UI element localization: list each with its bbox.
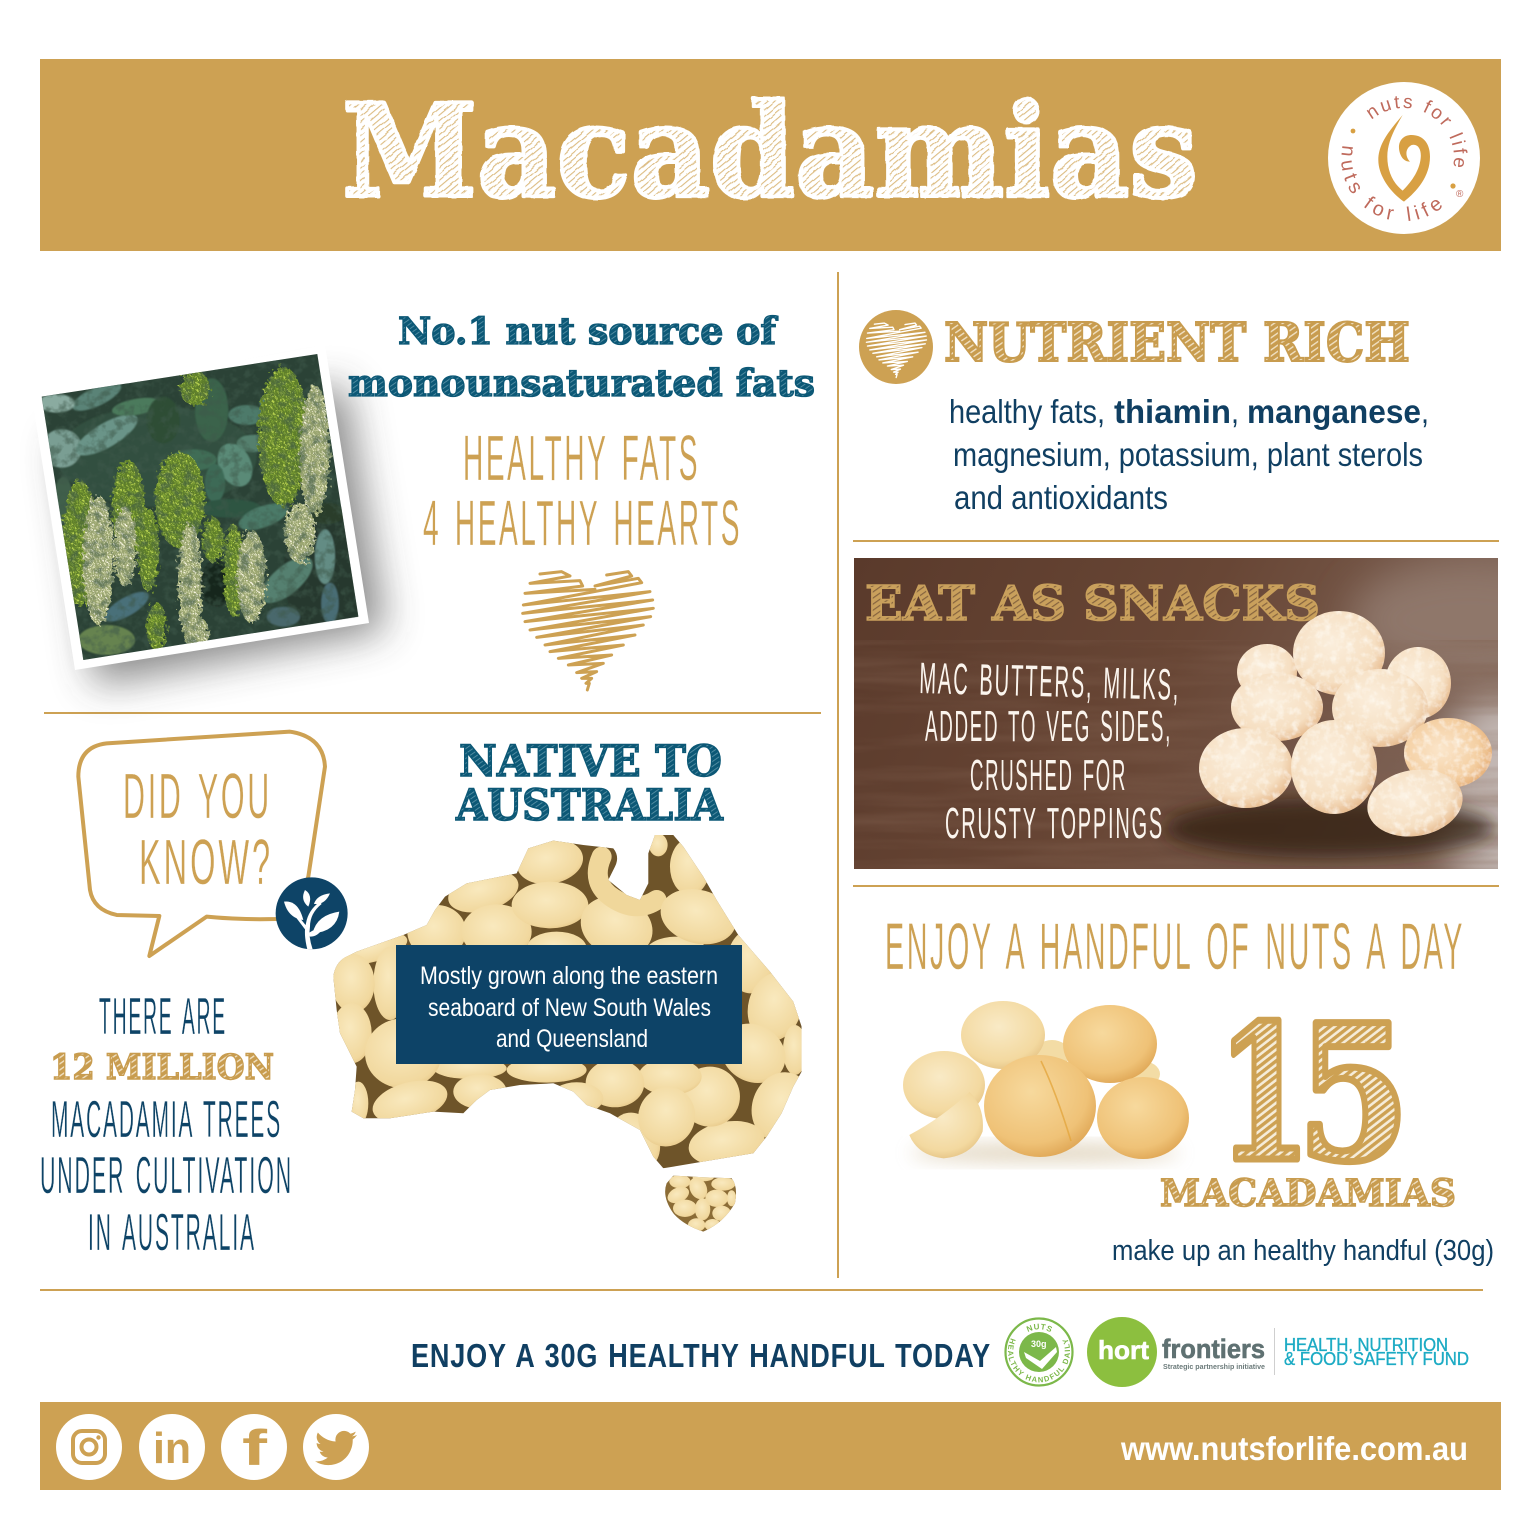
footer banner (40, 1402, 1501, 1490)
heading: no.1 nut source: monounsaturated fats (348, 361, 815, 405)
icon: leaves (276, 877, 348, 949)
logo: hort frontiers (1087, 1317, 1275, 1387)
text: healthy fats 4 healthy hearts: HEALTHY FATS (463, 422, 700, 494)
logo: health, nutrition and food safety fund: HEALTH, NUTRITION (1284, 1335, 1448, 1355)
icon: instagram (56, 1414, 122, 1480)
heading: native to australia: AUSTRALIA (455, 781, 724, 831)
heading: no.1 nut source: No.1 nut source of (398, 309, 778, 353)
speech bubble: did you know: KNOW? (139, 826, 273, 898)
number: 15 (1217, 984, 1410, 1204)
nutrient list: , (1421, 393, 1429, 430)
text: 12 million trees (40, 988, 293, 1262)
nutrient list: and antioxidants (954, 479, 1168, 516)
heading: eat as snacks: EAT AS SNACKS (865, 576, 1320, 632)
logo: nuts for life: ® (1456, 189, 1464, 200)
infographic: macadamias: 4 HEALTHY HEARTS (423, 487, 742, 559)
nutrient list: healthy fats, (949, 393, 1105, 430)
logo: health, nutrition and food safety fund: & FOOD SAFETY FUND (1284, 1349, 1469, 1369)
map: australia filled with nuts (333, 835, 802, 1232)
heading: nutrient rich: NUTRIENT RICH (944, 312, 1410, 374)
snack ideas text: CRUSHED FOR (970, 751, 1127, 800)
nutrient list: thiamin (1114, 393, 1231, 430)
label: macadamias: MACADAMIAS (1160, 1171, 1456, 1215)
heading: native to australia (455, 737, 724, 831)
logo: health, nutrition and food safety fund (1284, 1335, 1469, 1369)
website url: www.nutsforlife.com.au (1120, 1430, 1468, 1467)
nutrient list: manganese (1247, 393, 1421, 430)
logo: nuts for life: nuts for life (1366, 96, 1468, 167)
heading: native to australia: NATIVE TO (459, 737, 722, 787)
text: 12 million trees: THERE ARE (99, 988, 227, 1046)
infographic: macadamias: UNDER CULTIVATION (40, 1147, 293, 1205)
logo: hort frontiers: hort (1098, 1335, 1149, 1365)
dividers (40, 272, 1499, 1291)
icon: heart badge (859, 310, 933, 384)
header banner (40, 59, 1501, 251)
nutrient list (949, 393, 1429, 516)
tagline: enjoy a 30g healthy handful today: ENJOY A 30G HEALTHY HANDFUL TODAY (411, 1337, 991, 1374)
text: handful size: make up an healthy handful (30g) (1112, 1235, 1494, 1267)
badge: 30g healthy handful daily (1004, 1317, 1100, 1387)
badge: 30g healthy handful daily: NUTS (1026, 1324, 1052, 1332)
number: 15: 5 (1297, 984, 1410, 1204)
text: 12 million trees: 12 MILLION (50, 1047, 274, 1088)
logo: nuts for life: nuts for life (1341, 146, 1442, 221)
panel: nutrient rich (859, 310, 1429, 516)
icon: linkedin: in (153, 1424, 191, 1473)
photo: macadamia flowers (30, 340, 385, 685)
infographic: macadamias: MACADAMIA TREES (51, 1091, 282, 1149)
panel: eat as snacks photo: ADDED TO VEG SIDES, (925, 702, 1172, 751)
speech bubble: did you know: DID YOU (123, 760, 272, 832)
badge: 30g healthy handful daily: 30g (1031, 1339, 1047, 1349)
infographic: macadamias: IN AUSTRALIA (88, 1204, 256, 1262)
logo: hort frontiers: Strategic partnership initiative (1163, 1364, 1265, 1371)
heading: no.1 nut source (348, 309, 815, 405)
icon: facebook (221, 1414, 287, 1480)
callout: mostly grown along the eastern seaboard: seaboard of New South Wales (428, 994, 711, 1022)
image: whole macadamias (903, 1001, 1189, 1162)
callout: mostly grown along the eastern seaboard (396, 945, 742, 1064)
title: Macadamias (342, 77, 1198, 227)
panel: eat as snacks photo (854, 558, 1498, 869)
nutrient list: , (1231, 393, 1239, 430)
snack ideas text (920, 662, 1176, 838)
panel: eat as snacks photo: CRUSTY TOPPINGS (945, 799, 1164, 848)
text: healthy fats 4 healthy hearts (423, 422, 742, 559)
icon: twitter (303, 1414, 369, 1480)
callout: mostly grown along the eastern seaboard: Mostly grown along the eastern (420, 962, 718, 990)
callout: mostly grown along the eastern seaboard: and Queensland (496, 1025, 648, 1053)
logo: hort frontiers: frontiers (1162, 1334, 1265, 1364)
speech bubble: did you know (78, 732, 325, 956)
number: 15: 1 (1217, 984, 1311, 1204)
map: tasmania (665, 1176, 736, 1232)
icon: facebook: f (242, 1420, 268, 1476)
panel: eat as snacks photo: MAC BUTTERS, MILKS, (919, 654, 1181, 710)
badge: 30g healthy handful daily: HEALTHY HANDFUL DAILY (1008, 1338, 1070, 1382)
icon: linkedin (139, 1414, 205, 1480)
logo: nuts for life (1328, 82, 1480, 234)
icon: scribble heart (523, 572, 653, 690)
nutrient list: magnesium, potassium, plant sterols (953, 436, 1423, 473)
